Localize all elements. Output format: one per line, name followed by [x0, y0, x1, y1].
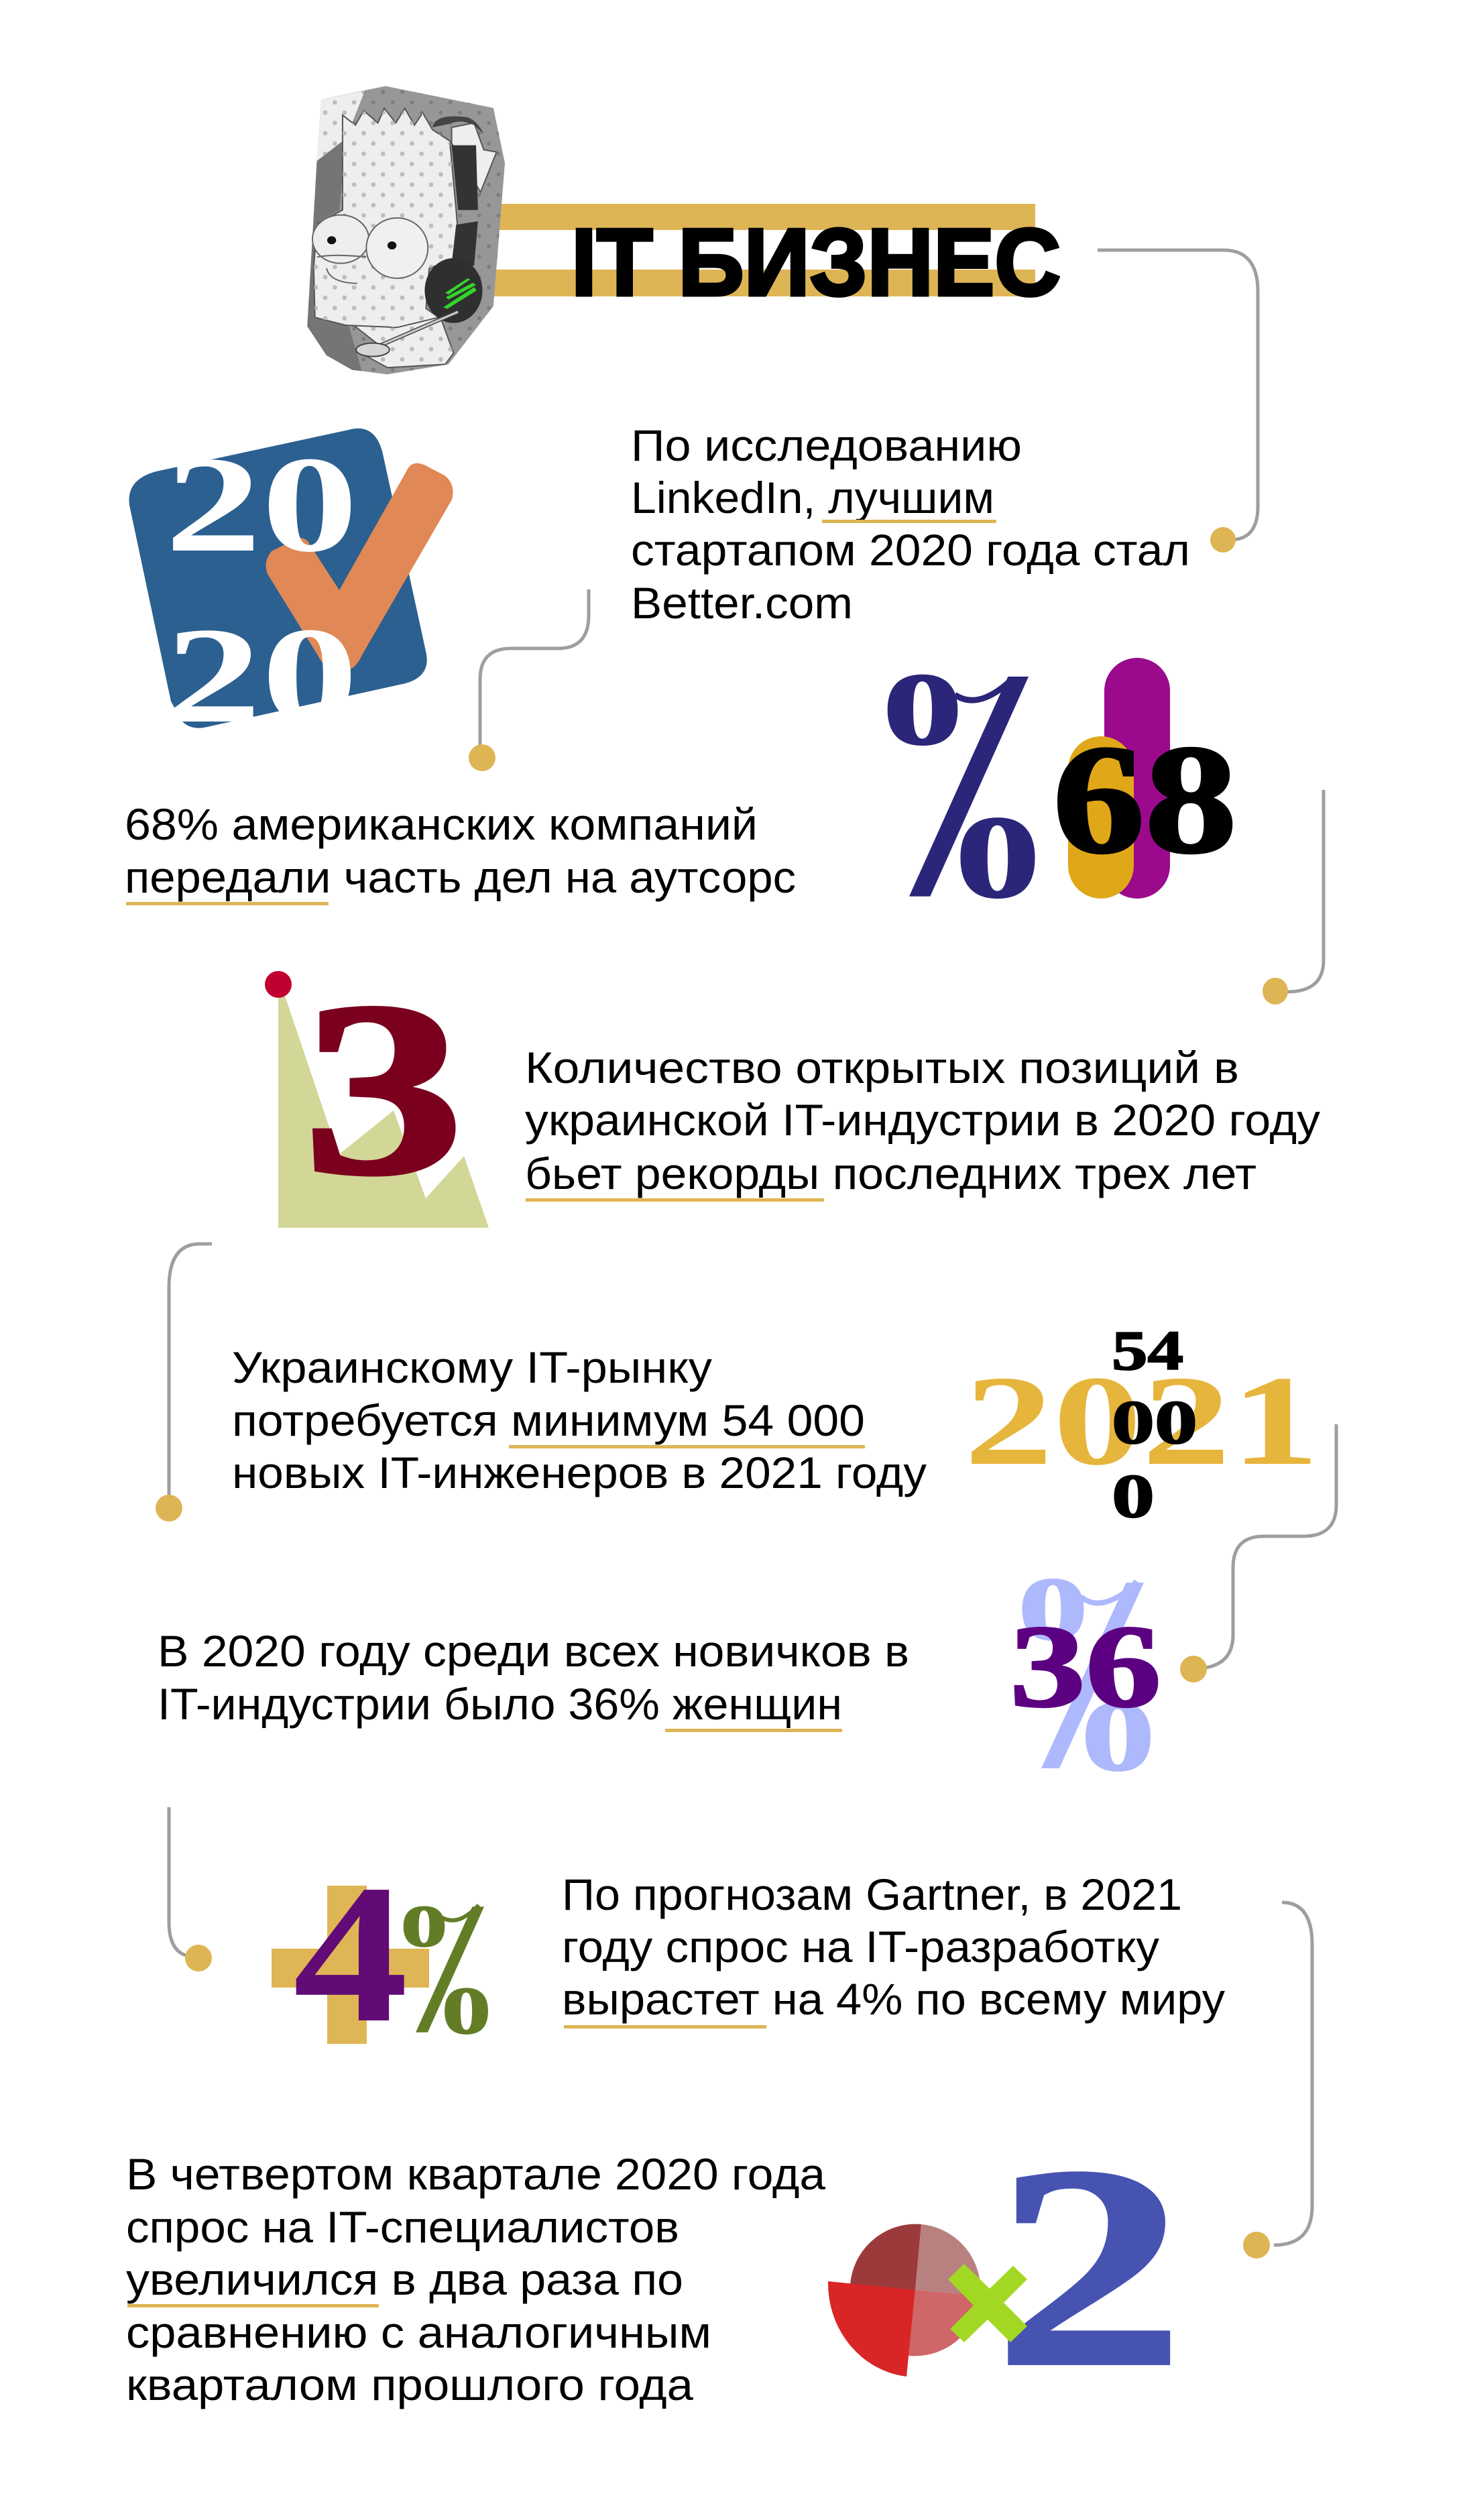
text block: Gartner forecast: вырастет на 4% по всему миру	[562, 1974, 1225, 2024]
icon: 2021 and 54 000	[964, 1320, 1320, 1530]
text block: Gartner forecast: году спрос на IT-разработку	[562, 1922, 1159, 1971]
text block: LinkedIn: Better.com	[631, 578, 853, 628]
icon: 2021 and 54 000: 00	[1112, 1388, 1197, 1456]
underline: лучшим	[822, 520, 996, 523]
icon: area chart with 3	[265, 952, 489, 1228]
percent sign: /	[909, 600, 1030, 964]
text block: Q4 demand: В четвертом квартале 2020 года	[126, 2149, 825, 2199]
text block: outsourcing: 68% американских компаний	[125, 799, 758, 849]
percent sign: /	[416, 1863, 485, 2071]
icon: pie chart times 2	[828, 2108, 1185, 2427]
text block: Q4 demand: кварталом прошлого года	[126, 2360, 693, 2409]
underline: женщин	[665, 1729, 842, 1732]
percent sign: 0	[442, 1973, 491, 2048]
underline: увеличился	[127, 2304, 379, 2307]
text block: Gartner forecast	[562, 1870, 1225, 2028]
connector: open positions to engineers text	[156, 1244, 212, 1522]
icon: 36 percent	[1010, 1518, 1161, 1826]
text block: Q4 demand: сравнению с аналогичным	[126, 2307, 711, 2357]
text block: LinkedIn: По исследованию	[631, 420, 1022, 470]
connector: forecast to demand text	[1243, 1902, 1312, 2258]
icon: plus 4 percent	[272, 1844, 491, 2071]
underline: минимум 54 000	[509, 1445, 865, 1448]
percent sign: 0	[955, 792, 1040, 922]
icon: 2021 and 54 000: 0	[1112, 1462, 1155, 1530]
illustration: cartoon character with headset	[307, 86, 505, 374]
icon: pie chart times 2: 2	[994, 2108, 1185, 2427]
text block: engineers: новых IT-инженеров в 2021 году	[232, 1448, 927, 1497]
icon: 2020 card with check mark: 20	[165, 599, 358, 752]
icon: 68 percent: 68	[1053, 713, 1237, 886]
percent sign: 0	[883, 653, 962, 766]
percent sign	[1018, 1518, 1155, 1826]
connector: 2020 card to outsourcing text	[469, 589, 589, 771]
text block: engineers	[232, 1342, 927, 1497]
text block: Q4 demand: увеличился в два раза по	[126, 2254, 683, 2304]
text block: open positions: украинской IT-индустрии в 2020 году	[525, 1095, 1320, 1145]
underline: передали	[126, 902, 329, 905]
text block: outsourcing	[125, 799, 796, 905]
text block: Gartner forecast: По прогнозам Gartner, в 2021	[562, 1870, 1182, 1919]
icon: 68 percent	[883, 600, 1237, 964]
percent sign: /	[1041, 1518, 1145, 1826]
icon: 2021 and 54 000: 54	[1112, 1320, 1183, 1382]
percent sign: 0	[1082, 1681, 1155, 1792]
icon: 2020 card with check mark: 20	[165, 428, 358, 581]
title: IT БИЗНЕС	[571, 209, 1061, 316]
icon: area chart with 3: 3	[303, 952, 464, 1226]
underline: вырастет	[564, 2025, 766, 2028]
underline: бьет рекорды	[526, 1198, 824, 1202]
icon: 36 percent: 36	[1010, 1601, 1161, 1732]
icon: 2021 and 54 000: 2021	[964, 1349, 1320, 1492]
text block: women: IT-индустрии было 36% женщин	[158, 1679, 842, 1729]
text block: women: В 2020 году среди всех новичков в	[158, 1626, 909, 1676]
text block: LinkedIn: стартапом 2020 года стал	[631, 525, 1190, 575]
text block: outsourcing: передали часть дел на аутсорс	[125, 852, 796, 902]
text block: engineers: Украинскому IT-рынку	[232, 1342, 712, 1392]
text block: engineers: потребуется минимум 54 000	[232, 1395, 865, 1445]
icon: plus 4 percent: 4	[293, 1844, 408, 2064]
text block: open positions	[525, 1043, 1320, 1202]
title bars	[486, 204, 1035, 296]
text block: open positions: Количество открытых позиций в	[525, 1043, 1239, 1092]
text block: Q4 demand	[126, 2149, 825, 2409]
text block: LinkedIn: LinkedIn, лучшим	[631, 473, 994, 522]
text block: LinkedIn	[631, 420, 1190, 628]
percent sign	[401, 1863, 491, 2071]
connector: 2021 to women text	[1180, 1424, 1336, 1682]
connector: title to LinkedIn text	[1098, 250, 1258, 553]
connector: 68 percent to open positions	[1263, 790, 1324, 1005]
percent sign: 0	[1018, 1559, 1088, 1658]
icon: 2020 card with check mark	[129, 428, 453, 752]
text block: open positions: бьет рекорды последних трех лет	[525, 1149, 1257, 1198]
connector: women text to forecast	[169, 1807, 212, 1971]
text block: women	[158, 1626, 909, 1732]
text block: Q4 demand: спрос на IT-специалистов	[126, 2202, 679, 2252]
percent sign: 0	[401, 1894, 447, 1959]
percent sign	[883, 600, 1040, 964]
